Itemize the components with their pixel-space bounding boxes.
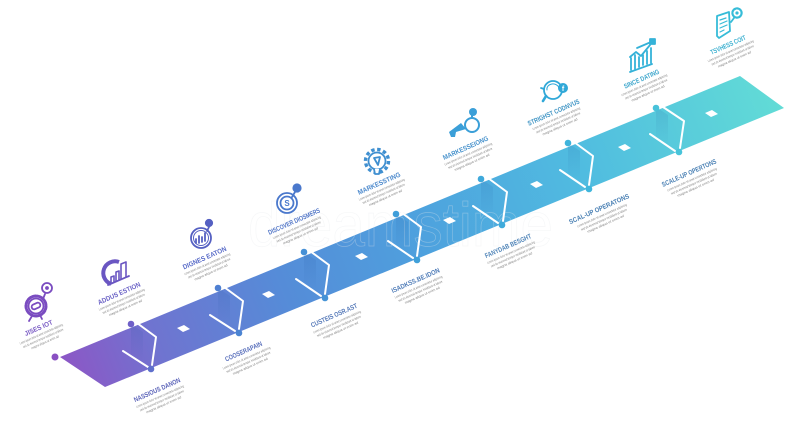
label: bottom 5: magna aliqua ut enim ad: [497, 251, 533, 270]
label: bottom 7: Lorem ipsum dolor sit amet consectetur adipiscing: [667, 167, 718, 192]
label: bottom 3: sed do eiusmod tempor incididunt ut labore: [316, 315, 362, 338]
label: top 4: DISCOVER DIOSMERS: [267, 207, 322, 237]
label: top 9: Lorem ipsum dolor sit amet consectetur adipiscing: [707, 39, 755, 63]
label: bottom 7: SCALE-UP OPERTONS: [661, 158, 718, 189]
icon: target: S: [284, 199, 290, 208]
label: bottom 5: FANYDAB BESGHT: [484, 233, 533, 260]
label: top 5: magna aliqua ut enim ad: [368, 189, 403, 207]
marker 3: [296, 249, 329, 301]
label: top 8: SINCE DATING: [623, 69, 661, 91]
label: bottom 6: [568, 193, 637, 239]
label: top 7: STRIGHST CODNVUS: [527, 98, 581, 128]
label: top 5: Lorem ipsum dolor sit amet consectetur adipiscing: [358, 178, 406, 202]
label: bottom 2: [219, 338, 275, 379]
label: top 6: magna aliqua ut enim ad: [454, 153, 490, 172]
label: top 2: sed do eiusmod tempor incididunt ut labore: [102, 292, 146, 315]
label: top 5: [355, 171, 409, 210]
step markers: [123, 105, 684, 372]
label: bottom 3: Lorem ipsum dolor sit amet consectetur adipiscing: [312, 310, 362, 334]
label: top 9: TSVHESS COIT: [710, 34, 748, 57]
label: top 5: sed do eiusmod tempor incididunt ut labore: [362, 182, 406, 205]
label: bottom 6: magna aliqua ut enim ad: [587, 214, 625, 234]
marker 4: [388, 211, 421, 263]
label: top 2: Lorem ipsum dolor sit amet consectetur adipiscing: [98, 288, 146, 312]
icon: headset: f: [562, 86, 565, 93]
label: top 8: magna aliqua ut enim ad: [631, 84, 665, 102]
label: top 7: [527, 98, 587, 140]
label: bottom 1: Lorem ipsum dolor sit amet consectetur adipiscing: [135, 384, 185, 409]
label: top 6: sed do eiusmod tempor incididunt ut labore: [447, 147, 493, 170]
label: top 5: MARKESSTING: [357, 172, 402, 197]
label: bottom 3: CUSTEIS OSR.AST: [310, 302, 359, 329]
label: top 2: [95, 281, 149, 320]
label: top 8: sed do eiusmod tempor incididunt ut labore: [624, 78, 668, 100]
icon: gear bulb: [366, 150, 388, 174]
label: top 3: sed do eiusmod tempor incididunt ut labore: [187, 257, 231, 279]
label: top 3: Lorem ipsum dolor sit amet consectetur adipiscing: [184, 252, 231, 276]
label: bottom 3: magna aliqua ut enim ad: [323, 321, 359, 340]
label: top 6: Lorem ipsum dolor sit amet consectetur adipiscing: [444, 142, 493, 167]
label: bottom 5: Lorem ipsum dolor sit amet consectetur adipiscing: [486, 240, 536, 265]
label: top 6: [441, 135, 497, 175]
label: top 7: sed do eiusmod tempor incididunt ut labore: [535, 111, 581, 134]
label: top 4: Lorem ipsum dolor sit amet consectetur adipiscing: [272, 215, 321, 240]
label: bottom 2: Lorem ipsum dolor sit amet consectetur adipiscing: [222, 346, 271, 370]
label: top 1: magna aliqua ut enim ad: [30, 334, 60, 350]
label: top 3: magna aliqua ut enim ad: [194, 263, 228, 281]
marker 7: [650, 105, 684, 155]
label: top 9: magna aliqua ut enim ad: [717, 50, 752, 68]
label: bottom 6: SCAL-UP OPERATONS: [568, 193, 631, 226]
label: bottom 5: sed do eiusmod tempor incididunt ut labore: [490, 245, 536, 268]
label: bottom 7: sed do eiusmod tempor incididunt ut labore: [670, 172, 718, 196]
label: bottom 4: [391, 267, 447, 308]
label: top 8: [618, 66, 672, 105]
label: bottom 2: magna aliqua ut enim ad: [232, 357, 269, 376]
label: bottom 2: sed do eiusmod tempor incididunt ut labore: [226, 351, 271, 374]
label: bottom 1: [132, 377, 188, 417]
marker 1: [123, 321, 156, 372]
label: bottom 3: [309, 302, 365, 343]
label: top 1: sed do eiusmod tempor incididunt ut labore: [22, 327, 64, 349]
label: bottom 1: magna aliqua ut enim ad: [146, 395, 182, 414]
white diamonds: [177, 110, 718, 332]
label: bottom 4: Lorem ipsum dolor sit amet consectetur adipiscing: [394, 275, 443, 299]
label: top 9: sed do eiusmod tempor incididunt ut labore: [711, 44, 755, 66]
label: top 1: [16, 316, 67, 354]
label: bottom 6: Lorem ipsum dolor sit amet consectetur adipiscing: [577, 203, 628, 228]
marker 6: [560, 140, 593, 192]
label: bottom 7: magna aliqua ut enim ad: [677, 178, 715, 198]
timeline band: [60, 76, 784, 387]
icon: megaphone and circles: [449, 108, 479, 137]
icon: headset: [541, 81, 568, 101]
start dot: [52, 354, 58, 360]
marker 2: [210, 285, 243, 336]
icon: chart circle: [191, 220, 212, 248]
label: bottom 2: COOSERAPAIN: [224, 341, 264, 363]
label: top 3: [181, 245, 235, 284]
label: top 4: magna aliqua ut enim ad: [282, 226, 319, 245]
icon: gear and bars: [103, 261, 129, 285]
watermark: dreamstime: [248, 191, 553, 260]
label: top 7: Lorem ipsum dolor sit amet consectetur adipiscing: [532, 106, 581, 131]
label: bottom 4: ISADKSS.BE.IDON: [391, 267, 441, 295]
marker 5: [473, 176, 507, 228]
label: bottom 1: sed do eiusmod tempor incididunt ut labore: [139, 389, 185, 412]
label: bottom 6: sed do eiusmod tempor incididunt ut labore: [580, 208, 628, 232]
label: top 2: ADDUS ESTION: [97, 282, 142, 307]
label: top 4: sed do eiusmod tempor incididunt ut labore: [276, 220, 322, 243]
label: top 1: JISES IOT: [24, 319, 55, 338]
label: top 7: magna aliqua ut enim ad: [542, 117, 578, 136]
label: bottom 4: sed do eiusmod tempor incididunt ut labore: [398, 280, 443, 303]
label: top 9: [704, 32, 758, 71]
icon: growth chart: [630, 39, 655, 72]
icon: robot gear: [26, 283, 52, 321]
label: top 8: Lorem ipsum dolor sit amet consectetur adipiscing: [621, 73, 668, 97]
label: bottom 1: NASSIOUS DANON: [133, 377, 182, 404]
icon: target: [277, 183, 302, 213]
label: bottom 5: [483, 233, 539, 273]
label: bottom 4: magna aliqua ut enim ad: [404, 286, 441, 305]
label: top 6: MARKESSEIONG: [442, 135, 490, 162]
icon: document and gear: [717, 8, 742, 38]
label: top 3: DIGNES EATON: [182, 246, 228, 271]
label: top 2: magna aliqua ut enim ad: [108, 299, 143, 317]
label: bottom 7: [661, 158, 724, 202]
label: top 1: Lorem ipsum dolor sit amet consectetur adipiscing: [19, 323, 64, 345]
label: top 4: [267, 207, 327, 249]
